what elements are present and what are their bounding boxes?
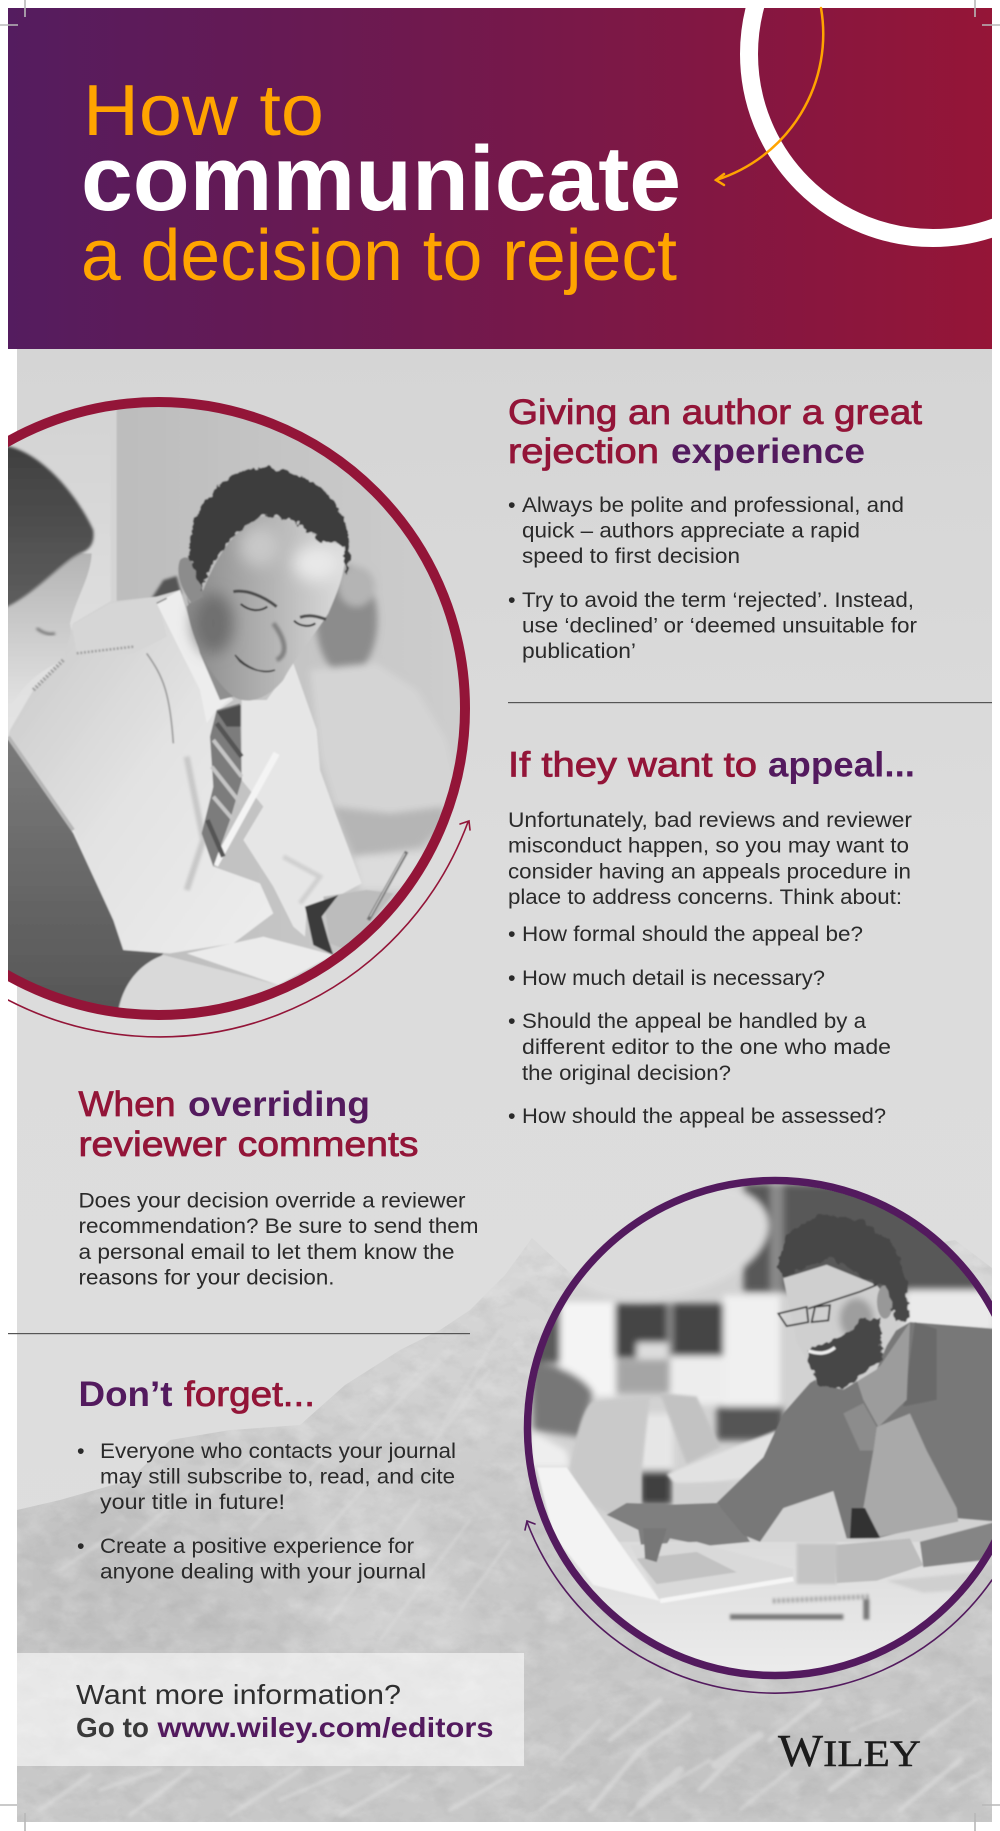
paragraph: Does your decision override a reviewer bbox=[78, 1188, 466, 1212]
bullets: different editor to the one who made bbox=[522, 1035, 891, 1059]
paragraph: reasons for your decision. bbox=[78, 1266, 334, 1290]
bullets: use ‘declined’ or ‘deemed unsuitable for bbox=[522, 614, 917, 638]
title: a decision to reject bbox=[81, 216, 677, 296]
wiley logo: W bbox=[778, 1726, 824, 1776]
bullets: How should the appeal be assessed? bbox=[522, 1104, 886, 1128]
heading: appeal... bbox=[768, 746, 915, 784]
blurred office background bbox=[530, 1165, 997, 1515]
heading bbox=[508, 746, 915, 784]
intro paragraph: consider having an appeals procedure in bbox=[508, 859, 911, 883]
dark vest of woman bbox=[0, 737, 163, 1010]
laptop bbox=[537, 1467, 793, 1601]
want more information: Want more information? bbox=[76, 1679, 401, 1710]
purple thin curved arrow bbox=[525, 1521, 992, 1693]
red ring bbox=[0, 402, 465, 1015]
title: How to bbox=[83, 71, 324, 151]
bullets bbox=[77, 1439, 456, 1584]
call to action box bbox=[17, 1653, 524, 1766]
section: when overriding reviewer comments bbox=[78, 1085, 478, 1290]
blurred charts on table bbox=[730, 1572, 977, 1620]
background panel with mountain bbox=[17, 349, 992, 1822]
section: don't forget bbox=[77, 1375, 456, 1584]
rock streaks bbox=[44, 1426, 985, 1816]
table bbox=[564, 1542, 979, 1672]
heading: Giving an author a great bbox=[508, 393, 922, 432]
title bbox=[81, 71, 681, 296]
tie bbox=[202, 703, 242, 867]
heading: rejection bbox=[508, 432, 659, 471]
right arm and hand bbox=[797, 1522, 997, 1584]
arm bbox=[606, 1502, 750, 1546]
bullets: your title in future! bbox=[100, 1490, 285, 1514]
intro paragraph: misconduct happen, so you may want to bbox=[508, 834, 909, 858]
heading: forget... bbox=[184, 1375, 315, 1414]
header banner bbox=[8, 0, 1000, 349]
heading: If they want to bbox=[508, 746, 757, 784]
paragraph: a personal email to let them know the bbox=[78, 1240, 454, 1264]
neck and face bbox=[178, 468, 350, 701]
bullets: • bbox=[508, 922, 516, 946]
bullets: • bbox=[508, 588, 516, 612]
paragraph: recommendation? Be sure to send them bbox=[78, 1214, 478, 1238]
white ring bbox=[749, 0, 1000, 238]
bullets: quick – authors appreciate a rapid bbox=[522, 518, 860, 542]
orange curved arrow bbox=[716, 8, 823, 185]
finger bbox=[644, 1542, 663, 1562]
divider left bbox=[8, 1333, 470, 1334]
shirt bbox=[8, 590, 273, 953]
intro paragraph: place to address concerns. Think about: bbox=[508, 885, 902, 909]
woman at left bbox=[8, 445, 96, 672]
right sleeve bbox=[215, 663, 362, 937]
bullets bbox=[508, 493, 917, 663]
bullets: • bbox=[77, 1534, 85, 1558]
bullets: • bbox=[508, 966, 516, 990]
bullets: How much detail is necessary? bbox=[522, 966, 825, 990]
heading bbox=[508, 393, 922, 471]
neck bbox=[857, 1322, 910, 1427]
bullets: • bbox=[77, 1439, 85, 1463]
table and paper bbox=[118, 937, 333, 1015]
wiley logo: ILEY bbox=[823, 1734, 921, 1775]
wiley logo bbox=[778, 1726, 921, 1776]
section: if they want to appeal bbox=[508, 746, 915, 1128]
paragraph bbox=[78, 1188, 478, 1290]
heading: reviewer comments bbox=[78, 1125, 418, 1164]
blurred colleague in background bbox=[312, 562, 442, 890]
bullets: Should the appeal be handled by a bbox=[522, 1009, 866, 1033]
heading bbox=[78, 1085, 418, 1164]
photo: man with laptop bbox=[524, 1176, 992, 1690]
bullets: may still subscribe to, read, and cite bbox=[100, 1464, 455, 1488]
hand, watch and pen bbox=[305, 852, 407, 955]
section: giving an author a great rejection experience bbox=[508, 393, 922, 663]
bullets: How formal should the appeal be? bbox=[522, 922, 863, 946]
bullets: Create a positive experience for bbox=[100, 1534, 414, 1558]
mountain backdrop bbox=[17, 1238, 992, 1822]
bullets: publication’ bbox=[522, 639, 636, 663]
heading: Don’t bbox=[78, 1375, 173, 1414]
heading: When bbox=[78, 1085, 176, 1124]
go to link: Go to bbox=[76, 1712, 149, 1743]
purple ring bbox=[528, 1180, 1000, 1676]
heading bbox=[78, 1375, 315, 1414]
bullets: the original decision? bbox=[522, 1061, 731, 1085]
bullets: • bbox=[508, 493, 516, 517]
intro paragraph: Unfortunately, bad reviews and reviewer bbox=[508, 808, 912, 832]
divider right bbox=[508, 702, 992, 703]
bullets: Everyone who contacts your journal bbox=[100, 1439, 456, 1463]
heading: overriding bbox=[188, 1085, 370, 1124]
face bbox=[777, 1214, 910, 1390]
heading: experience bbox=[671, 432, 865, 471]
bullets: Always be polite and professional, and bbox=[522, 493, 904, 517]
bullets bbox=[508, 922, 891, 1128]
bullets: • bbox=[508, 1104, 516, 1128]
bullets: Try to avoid the term ‘rejected’. Instead, bbox=[522, 588, 914, 612]
red thin curved arrow bbox=[8, 821, 470, 1037]
shirt bbox=[717, 1322, 997, 1542]
bullets: anyone dealing with your journal bbox=[100, 1560, 426, 1584]
bullets: speed to first decision bbox=[522, 544, 740, 568]
go to link: www.wiley.com/editors bbox=[156, 1712, 494, 1743]
bullets: • bbox=[508, 1009, 516, 1033]
photo: man in shirt and tie bbox=[8, 397, 470, 1020]
title: communicate bbox=[81, 128, 681, 230]
intro paragraph bbox=[508, 808, 912, 909]
